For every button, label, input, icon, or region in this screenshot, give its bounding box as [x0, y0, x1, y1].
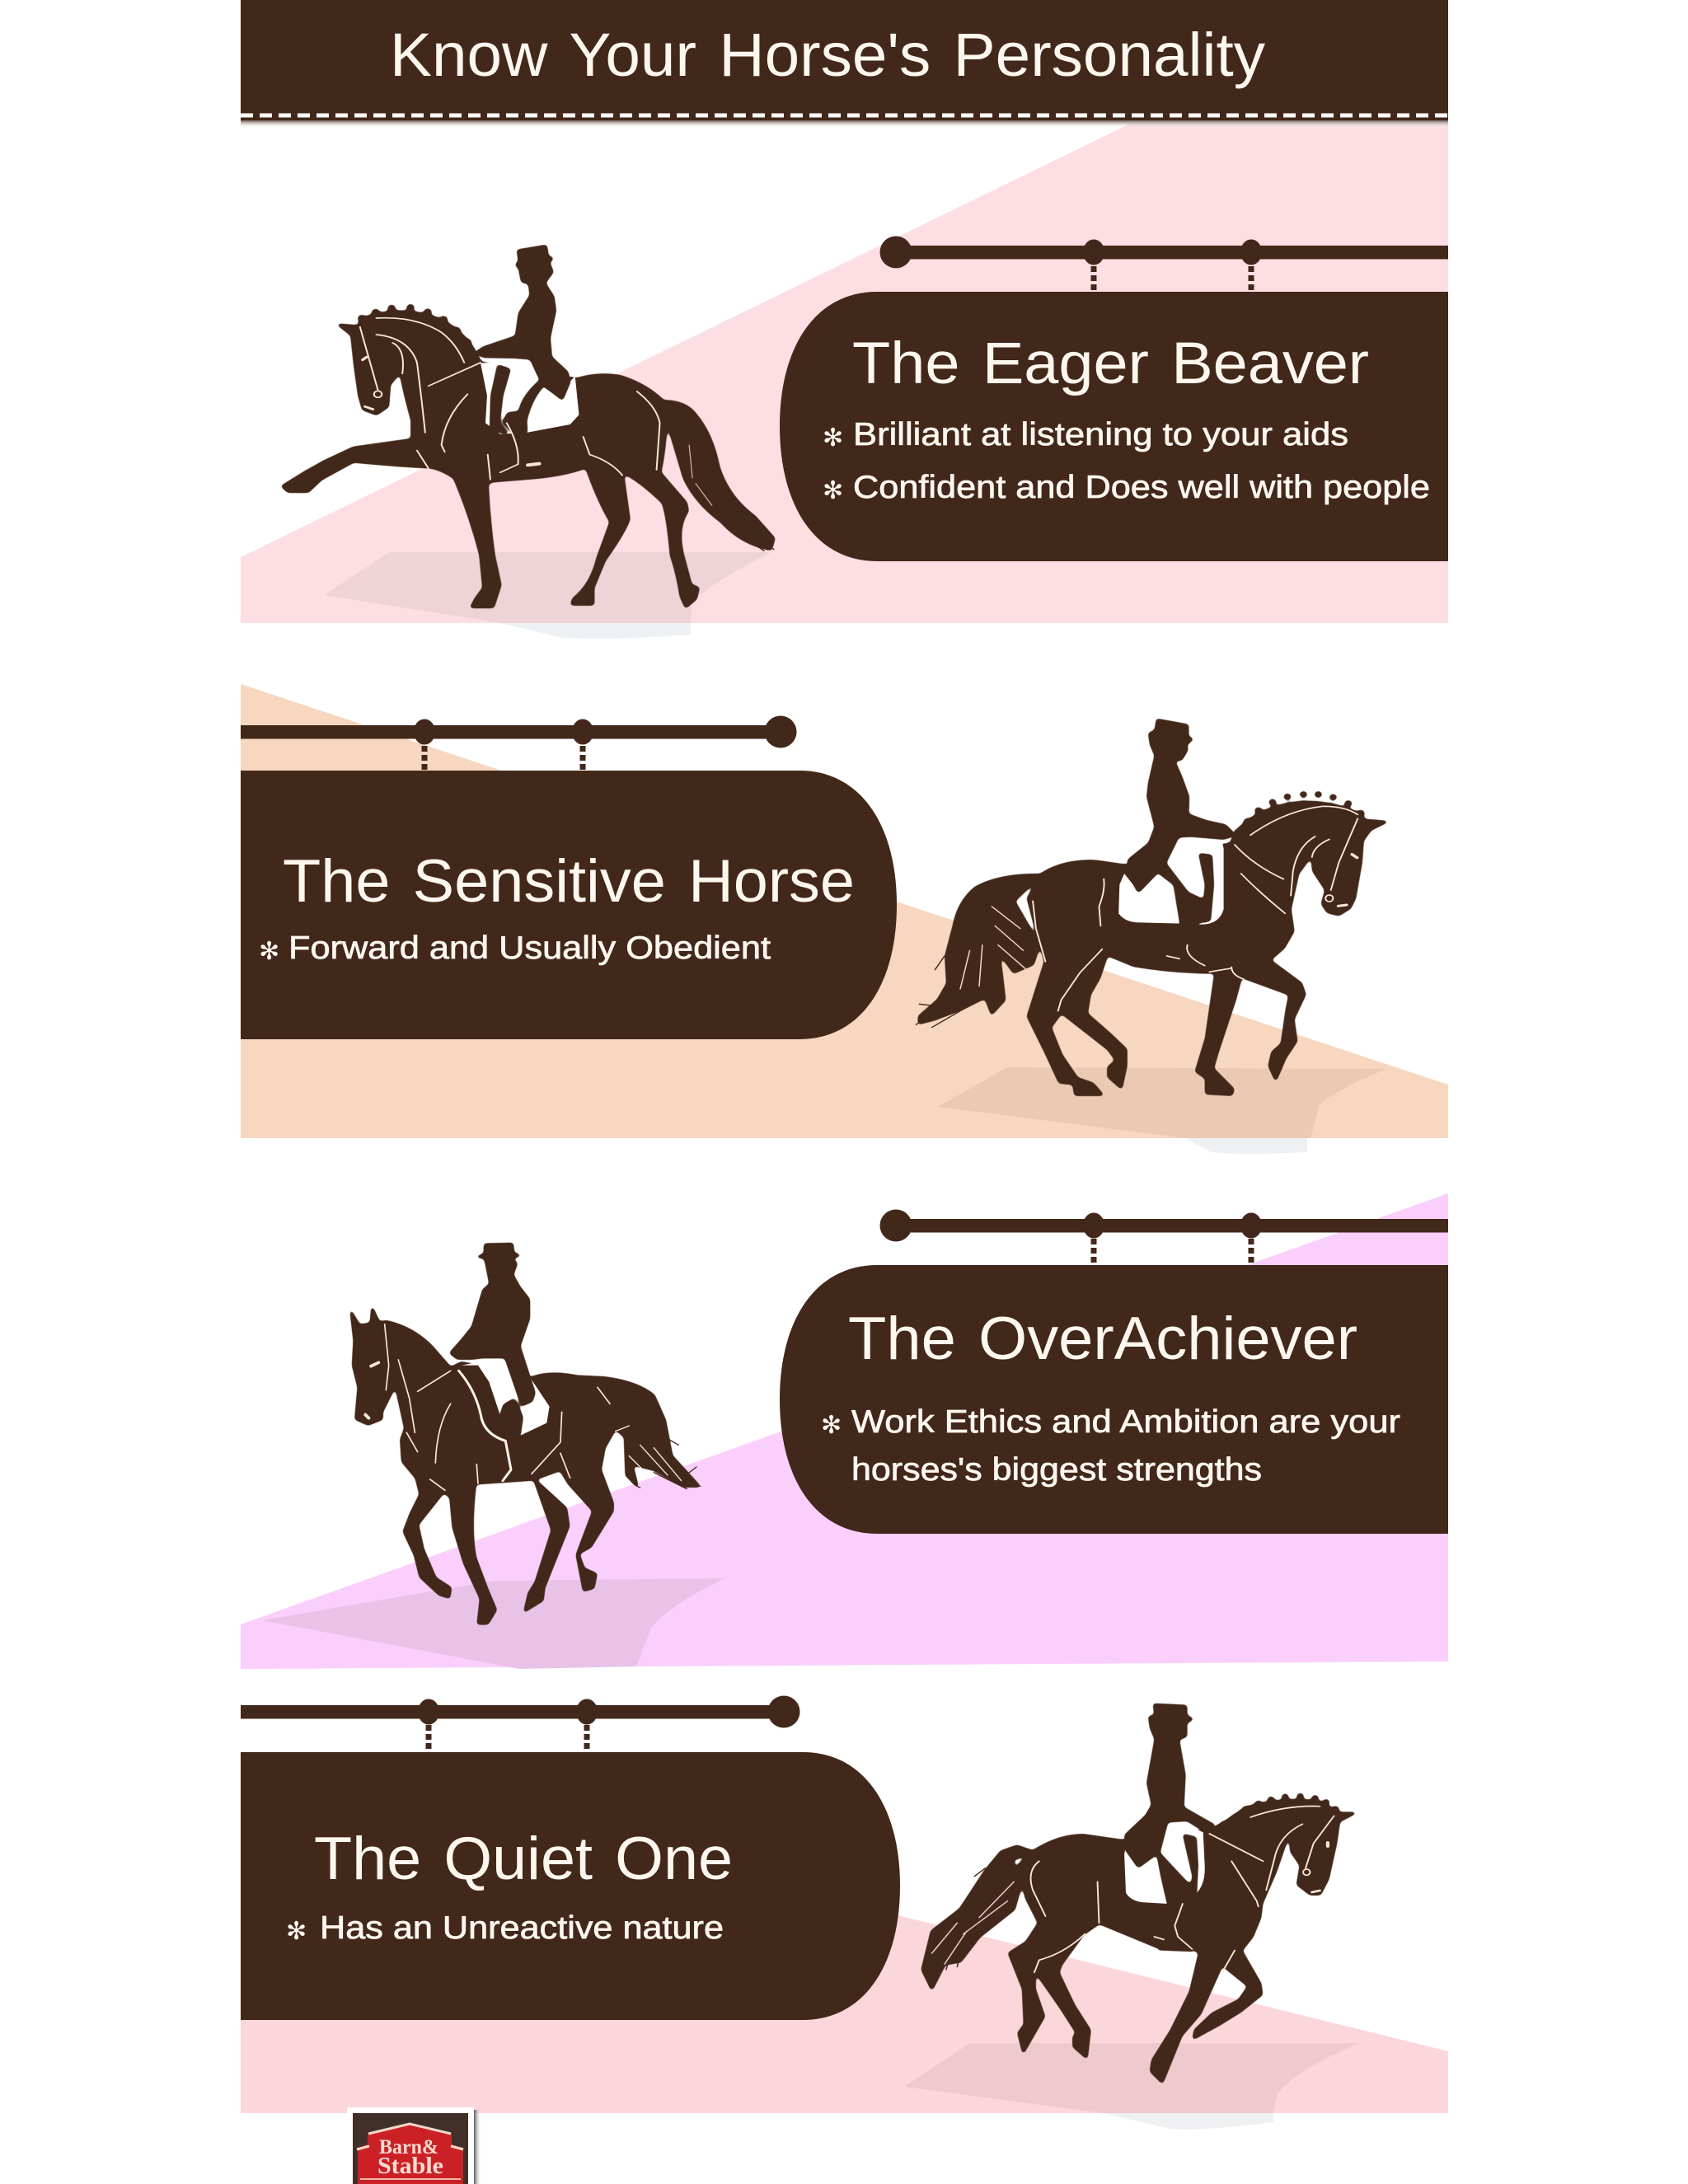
bullet 1: ✻ [823, 424, 843, 452]
board [780, 1265, 1448, 1534]
saddle pad [481, 360, 579, 434]
sign: The OverAchiever [780, 1210, 1448, 1534]
horse body [351, 1308, 699, 1624]
rider [476, 246, 570, 434]
rider [1126, 1704, 1214, 1951]
heading: The Quiet One [314, 1825, 733, 1892]
horse and rider 4 [922, 1704, 1354, 2083]
rail [241, 1696, 799, 1753]
panel: overachiever background [241, 1193, 1448, 1669]
logo: Barn & Stable: Stable [377, 2153, 443, 2179]
bullet 2: ✻ [823, 476, 843, 505]
bullet: Work Ethics and Ambition are your [851, 1404, 1400, 1440]
saddle pad [462, 1357, 550, 1436]
tail wisps [922, 1868, 986, 1988]
tail wisps [626, 1440, 701, 1489]
horse body [283, 304, 774, 607]
sign: The Quiet One [241, 1696, 900, 2020]
rider [451, 1244, 534, 1440]
bullet 2: Confident and Does well with people [853, 470, 1430, 505]
horse and rider 2 [916, 719, 1386, 1094]
rail [241, 715, 796, 771]
sign: The Eager Beaver [780, 236, 1448, 561]
panel: eager beaver background [241, 124, 1448, 639]
rail [880, 1210, 1448, 1266]
bullet: Forward and Usually Obedient [288, 930, 771, 966]
heading: The Eager Beaver [852, 331, 1369, 396]
saddle pad [1118, 837, 1224, 925]
highlights [932, 1806, 1334, 1972]
horse body [919, 791, 1386, 1094]
logo text: Barn& [379, 2136, 438, 2158]
board [241, 771, 897, 1039]
board [780, 292, 1448, 561]
rail [880, 236, 1448, 293]
horse and rider 3 [351, 1244, 701, 1624]
horse body [922, 1793, 1354, 2083]
bullet: horses's biggest strengths [851, 1452, 1262, 1488]
bullet [821, 1404, 1400, 1488]
tail wisps [916, 956, 1003, 1028]
bullet: ✻ [286, 1917, 307, 1946]
bullet: Has an Unreactive nature [320, 1910, 724, 1946]
saddle pad [1124, 1821, 1205, 1904]
highlights [360, 318, 712, 505]
panel: sensitive horse background [241, 684, 1448, 1154]
horse and rider 1 [283, 246, 774, 607]
sign: The Sensitive Horse [241, 715, 897, 1039]
highlights [960, 806, 1357, 1011]
bullet: ✻ [821, 1411, 842, 1440]
header banner [241, 0, 1448, 128]
bullet: ✻ [259, 937, 279, 966]
rider [1128, 719, 1235, 956]
logo: Barn & Stable [347, 2107, 481, 2184]
heading: The OverAchiever [848, 1305, 1357, 1372]
board [241, 1752, 900, 2020]
title: Know Your Horse's Personality [390, 21, 1265, 89]
highlights [365, 1324, 682, 1490]
heading: The Sensitive Horse [283, 848, 855, 915]
panel: quiet one background [241, 1753, 1448, 2130]
bullet 1: Brilliant at listening to your aids [853, 417, 1348, 452]
